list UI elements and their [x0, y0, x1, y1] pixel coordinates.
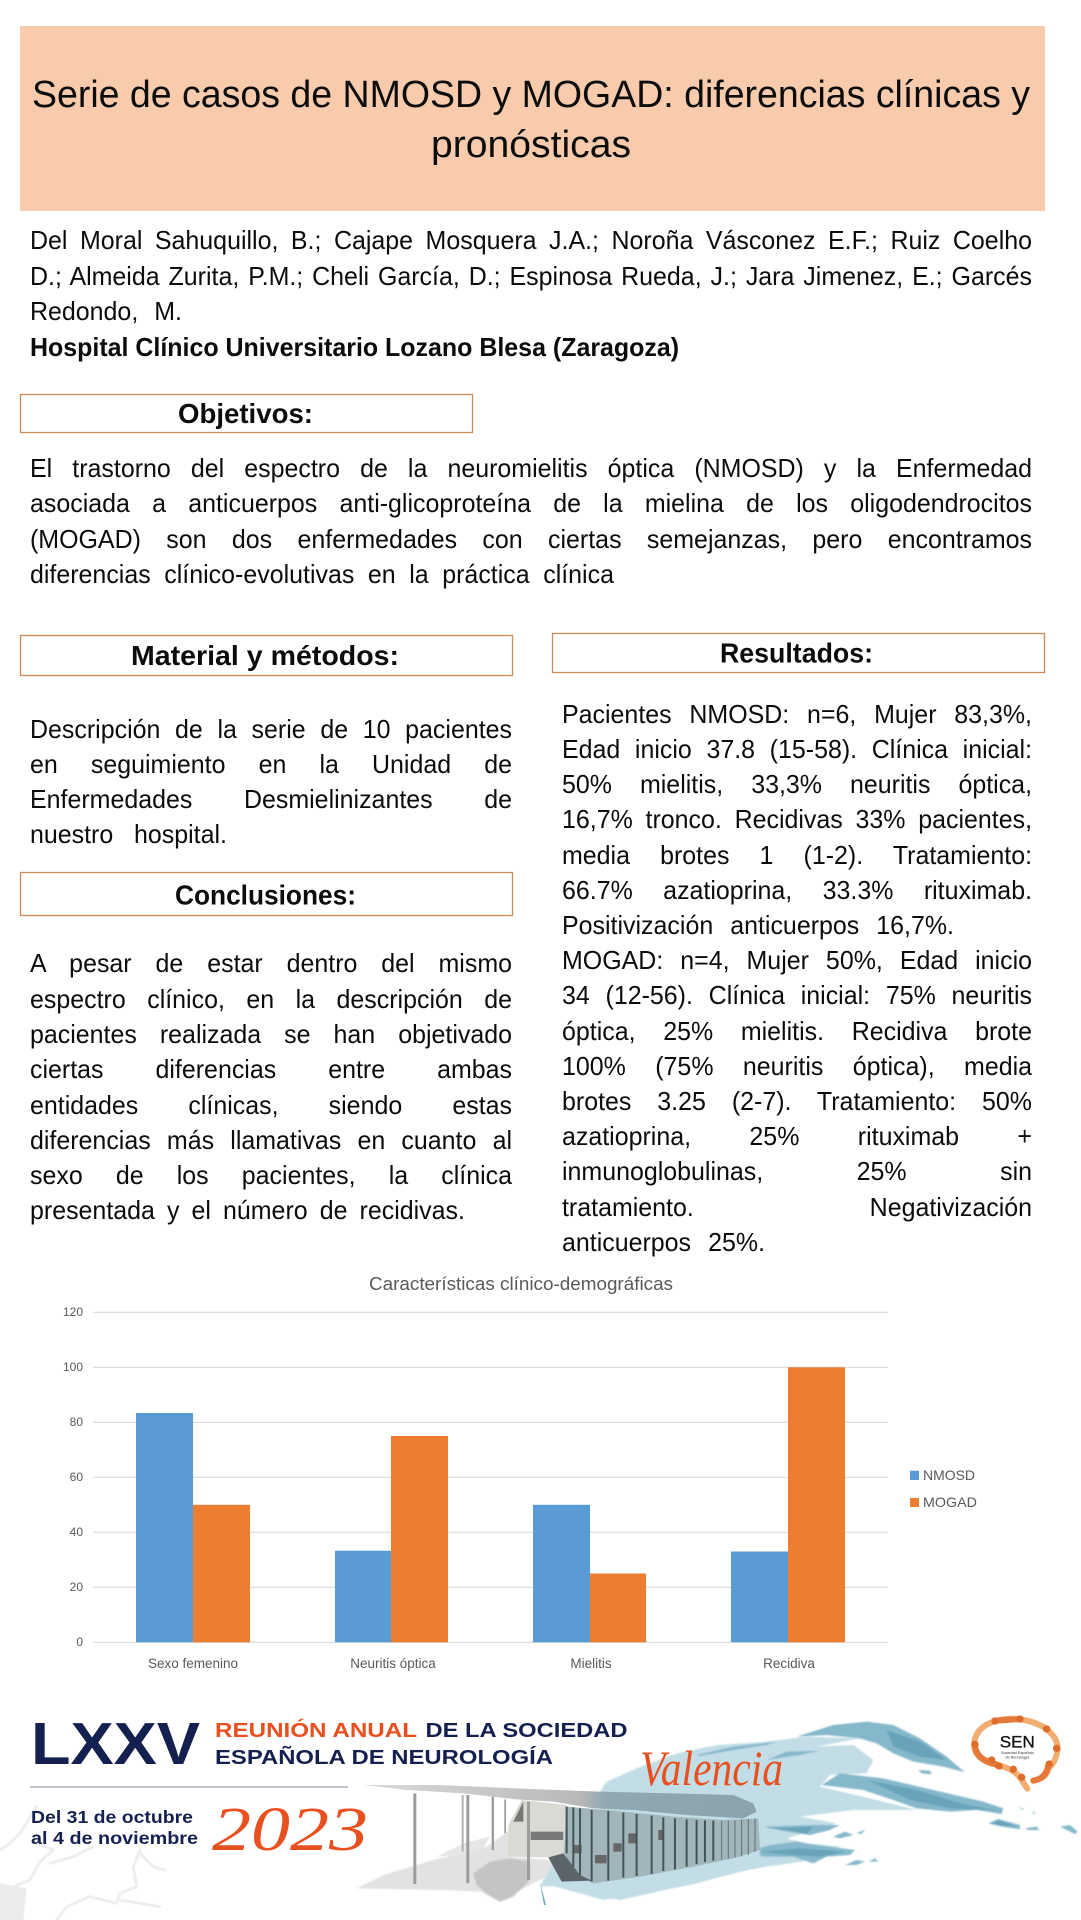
y axis labels: 100 — [63, 1360, 83, 1374]
y axis labels: 0 — [76, 1635, 83, 1649]
conclusiones text: pacientes realizada se han objetivado — [30, 1019, 512, 1049]
resultados text: 50% mielitis, 33,3% neuritis óptica, — [562, 769, 1032, 799]
legend — [910, 1467, 977, 1510]
resultados text: 66.7% azatioprina, 33.3% rituximab. — [562, 875, 1032, 905]
y axis labels: 80 — [70, 1415, 83, 1429]
LXXV numeral: LXXV — [31, 1711, 200, 1777]
heading: Material y métodos: Material y métodos: — [131, 640, 399, 671]
material y métodos text: Descripción de la serie de 10 pacientes — [30, 714, 512, 744]
x axis labels: Recidiva — [763, 1656, 815, 1671]
conclusiones text: presentada y el número de recidivas. — [30, 1195, 465, 1225]
conclusiones text: entidades clínicas, siendo estas — [30, 1090, 512, 1120]
SEN logo: SEN — [1000, 1734, 1035, 1752]
SEN logo — [971, 1715, 1060, 1789]
heading: Objetivos — [20, 394, 472, 432]
SEN logo: de Neurología — [1005, 1756, 1030, 1760]
year 2023: 2023 — [212, 1796, 368, 1864]
material y métodos text: nuestro hospital. — [30, 819, 227, 849]
resultados text: azatioprina, 25% rituximab + — [562, 1121, 1032, 1151]
x axis labels — [148, 1656, 815, 1671]
x axis labels: Neuritis óptica — [350, 1656, 436, 1671]
title banner: pronósticas — [431, 124, 631, 166]
y axis labels — [63, 1305, 83, 1649]
resultados text: Edad inicio 37.8 (15-58). Clínica inicial: — [562, 734, 1032, 764]
resultados text: 16,7% tronco. Recidivas 33% pacientes, — [562, 804, 1032, 834]
heading: Material y métodos — [20, 636, 512, 676]
bar chart: características clínico-demográficas — [63, 1274, 977, 1671]
conclusiones text: diferencias más llamativas en cuanto al — [30, 1125, 512, 1155]
authors and hospital: D.; Almeida Zurita, P.M.; Cheli García, D.; Espinosa Rueda, J.; Jara Jimenez, E.; Garcés — [30, 261, 1032, 291]
resultados text: óptica, 25% mielitis. Recidiva brote — [562, 1016, 1032, 1046]
building illustration — [357, 1785, 760, 1905]
congress name: ESPAÑOLA DE NEUROLOGÍA — [215, 1746, 553, 1769]
heading: Conclusiones — [20, 872, 512, 916]
objetivos text: El trastorno del espectro de la neuromielitis óptica (NMOSD) y la Enfermedad — [30, 453, 1032, 483]
heading: Objetivos: Objetivos: — [178, 398, 313, 429]
objetivos text: diferencias clínico-evolutivas en la práctica clínica — [30, 559, 614, 589]
gray vein background — [0, 1807, 165, 1920]
y axis labels: 60 — [70, 1470, 83, 1484]
conclusiones text: A pesar de estar dentro del mismo — [30, 948, 512, 978]
authors and hospital: Redondo, M. — [30, 296, 182, 326]
bars: Neuritis óptica — [335, 1436, 448, 1642]
conclusiones text: espectro clínico, en la descripción de — [30, 984, 512, 1014]
title banner: Serie de casos de NMOSD y MOGAD: diferencias clínicas y — [32, 74, 1030, 116]
heading: Conclusiones: Conclusiones: — [175, 880, 356, 911]
resultados text: Positivización anticuerpos 16,7%. — [562, 910, 954, 940]
bars: Mielitis — [533, 1505, 646, 1642]
title banner — [20, 26, 1045, 211]
heading: Resultados — [552, 634, 1044, 672]
SEN logo: Sociedad Española — [1001, 1751, 1035, 1755]
authors and hospital: Hospital Clínico Universitario Lozano Blesa (Zaragoza) — [30, 332, 679, 362]
chart title: Características clínico-demográficas — [369, 1274, 673, 1294]
objetivos text — [30, 453, 1032, 589]
Valencia lettering: Valencia — [640, 1740, 783, 1796]
x axis labels: Mielitis — [570, 1656, 612, 1671]
heading: Resultados: Resultados: — [720, 638, 873, 669]
conclusiones text — [30, 948, 512, 1225]
conclusiones text: ciertas diferencias entre ambas — [30, 1054, 512, 1084]
congress dates: Del 31 de octubre — [31, 1807, 193, 1827]
authors and hospital — [30, 225, 1032, 362]
objetivos text: (MOGAD) son dos enfermedades con ciertas semejanzas, pero encontramos — [30, 524, 1032, 554]
x axis labels: Sexo femenino — [148, 1656, 238, 1671]
resultados text: anticuerpos 25%. — [562, 1227, 765, 1257]
legend: MOGAD — [923, 1494, 977, 1510]
y axis labels: 40 — [70, 1525, 83, 1539]
y axis labels: 20 — [70, 1580, 83, 1594]
congress name: DE LA SOCIEDAD — [426, 1719, 628, 1742]
resultados text: brotes 3.25 (2-7). Tratamiento: 50% — [562, 1086, 1032, 1116]
objetivos text: asociada a anticuerpos anti-glicoproteína de la mielina de los oligodendrocitos — [30, 488, 1032, 518]
resultados text: tratamiento. Negativización — [562, 1192, 1032, 1222]
congress banner — [0, 1711, 1078, 1920]
conclusiones text: sexo de los pacientes, la clínica — [30, 1160, 512, 1190]
legend: NMOSD — [923, 1467, 975, 1483]
resultados text: 100% (75% neuritis óptica), media — [562, 1051, 1032, 1081]
bars: Recidiva — [731, 1367, 845, 1642]
congress dates — [31, 1807, 198, 1848]
material y métodos text — [30, 714, 512, 849]
congress name: REUNIÓN ANUAL — [215, 1718, 417, 1742]
bars: Sexo femenino — [136, 1413, 250, 1642]
watercolor wash — [600, 1722, 1078, 1900]
resultados text: Pacientes NMOSD: n=6, Mujer 83,3%, — [562, 699, 1032, 729]
congress name — [215, 1718, 628, 1769]
y axis labels: 120 — [63, 1305, 83, 1319]
resultados text — [562, 699, 1032, 1257]
resultados text: media brotes 1 (1-2). Tratamiento: — [562, 840, 1032, 870]
material y métodos text: en seguimiento en la Unidad de — [30, 749, 512, 779]
authors and hospital: Del Moral Sahuquillo, B.; Cajape Mosquera J.A.; Noroña Vásconez E.F.; Ruiz Coelho — [30, 225, 1032, 255]
congress dates: al 4 de noviembre — [31, 1828, 198, 1848]
material y métodos text: Enfermedades Desmielinizantes de — [30, 784, 512, 814]
resultados text: MOGAD: n=4, Mujer 50%, Edad inicio — [562, 945, 1032, 975]
resultados text: 34 (12-56). Clínica inicial: 75% neuritis — [562, 980, 1032, 1010]
resultados text: inmunoglobulinas, 25% sin — [562, 1156, 1032, 1186]
